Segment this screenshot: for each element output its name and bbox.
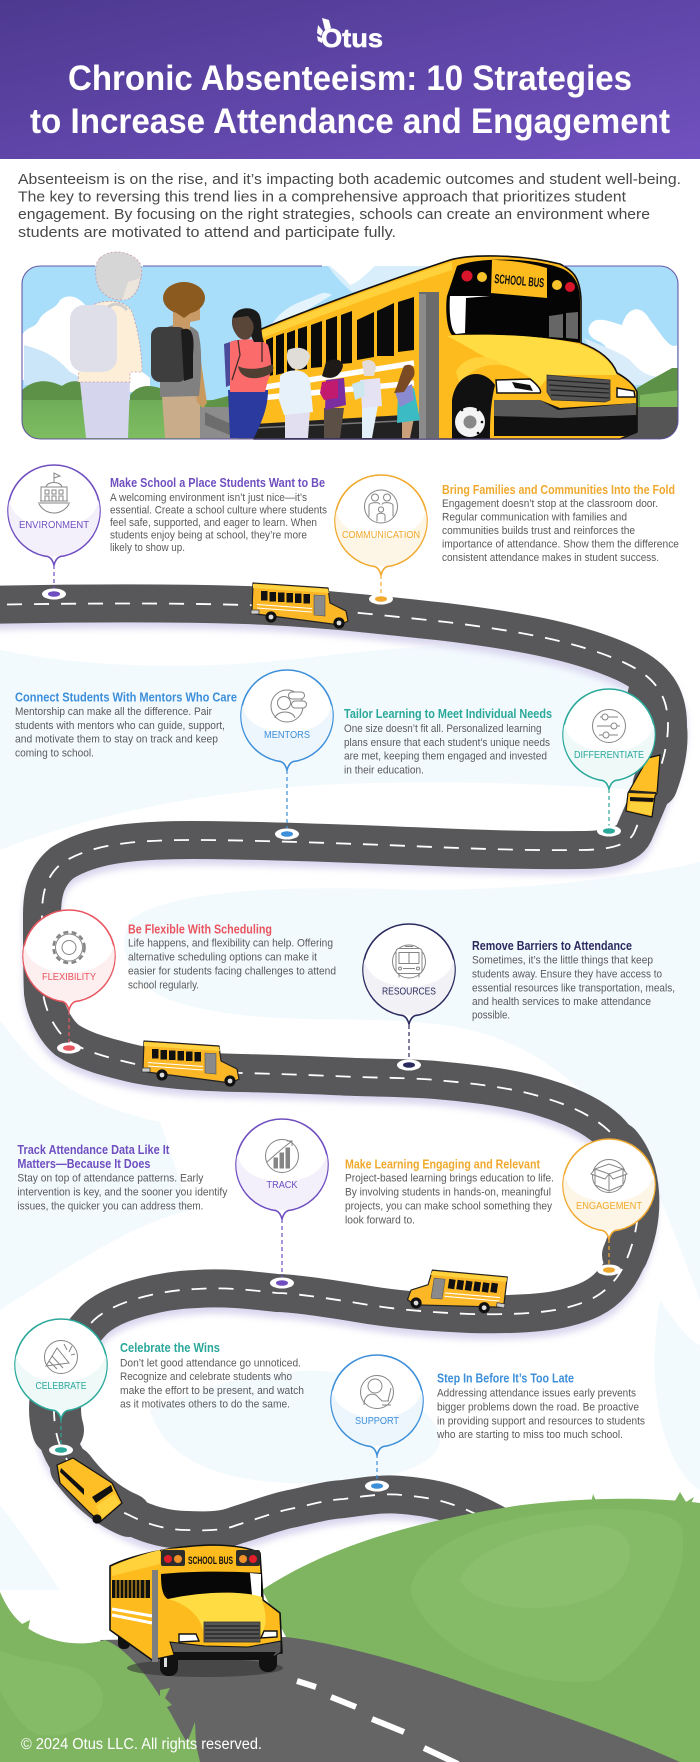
side windows — [112, 1580, 150, 1598]
text: differentiate strategy: Tailor Learning to Meet Individual Needs — [344, 707, 552, 721]
text: engagement strategy: Project-based learning brings education to life. — [345, 1173, 554, 1185]
hood — [447, 335, 617, 387]
windshield — [161, 1572, 262, 1599]
callout 2: communication — [335, 475, 427, 604]
side windows — [266, 297, 414, 377]
door — [419, 292, 439, 439]
icon: gear — [54, 932, 84, 963]
icon: sliders — [592, 710, 626, 742]
callout 7: track: TRACK — [266, 1179, 298, 1191]
intro paragraph: engagement. By focusing on the right strategies, schools can create an environment where — [18, 206, 650, 223]
icon: family — [364, 490, 398, 523]
text: track strategy: Track Attendance Data Like It — [17, 1143, 170, 1157]
text: communication strategy — [442, 483, 679, 564]
text: support strategy: who are starting to miss too much school. — [436, 1429, 623, 1441]
text: differentiate strategy: are met, keeping them engaged and invested — [344, 751, 547, 763]
faded student, foreground — [70, 252, 142, 438]
text: resources strategy: Remove Barriers to Attendance — [472, 939, 632, 953]
callout 10: support — [331, 1355, 423, 1492]
icon: rising bar chart — [266, 1140, 298, 1172]
student in coral shirt — [224, 308, 273, 438]
text: support strategy: Addressing attendance issues early prevents — [437, 1387, 636, 1399]
icon: party popper — [44, 1340, 78, 1374]
hood — [168, 1593, 266, 1642]
small bus on right bend, heading down — [626, 755, 660, 817]
text: resources strategy: essential resources like transportation, meals, — [472, 982, 675, 994]
callout 3: mentors — [241, 670, 333, 840]
title — [30, 58, 670, 141]
sign and lights: SCHOOL BUS — [188, 1555, 233, 1567]
text: flexibility strategy: alternative scheduling options can make it — [128, 952, 318, 964]
callout 4: differentiate: DIFFERENTIATE — [574, 749, 644, 761]
text: environment strategy: students enjoy being at school, they’re more — [110, 530, 307, 542]
callout 3: mentors: MENTORS — [264, 729, 310, 741]
text: mentors strategy: students with mentors who can guide, support, — [15, 720, 225, 732]
text: resources strategy: Sometimes, it’s the little things that keep — [472, 955, 653, 967]
faded student 6 — [352, 360, 382, 438]
text: flexibility strategy — [128, 922, 336, 991]
text: resources strategy: students away. Ensure they have access to — [472, 968, 662, 980]
icon: person at laptop — [360, 1376, 394, 1408]
text: track strategy: issues, the quicker you can address them. — [17, 1200, 203, 1212]
text: differentiate strategy — [344, 707, 552, 776]
text: celebrate strategy: Recognize and celebrate students who — [120, 1371, 292, 1383]
text: support strategy: Step In Before It’s Too Late — [437, 1372, 574, 1386]
intro paragraph: The key to reversing this trend lies in a comprehensive approach that prioritizes student — [18, 188, 627, 206]
school bus — [254, 256, 637, 439]
text: mentors strategy — [15, 690, 237, 760]
text: celebrate strategy: as it motivates others to do the same. — [120, 1399, 290, 1411]
text: resources strategy — [472, 939, 675, 1022]
text: engagement strategy — [345, 1157, 554, 1226]
callout 9: celebrate — [15, 1319, 107, 1456]
text: communication strategy: Regular communication with families and — [442, 512, 627, 524]
headlight — [496, 379, 541, 393]
text: mentors strategy: coming to school. — [15, 748, 94, 760]
callout 8: engagement: ENGAGEMENT — [576, 1200, 643, 1212]
text: mentors strategy: and motivate them to stay on track and keep — [15, 734, 218, 746]
text: engagement strategy: Make Learning Engaging and Relevant — [345, 1157, 541, 1171]
text: support strategy: in providing support and resources to students — [437, 1415, 645, 1427]
trees and grass — [22, 368, 680, 440]
clouds — [22, 266, 677, 392]
small bus on third road — [142, 1041, 239, 1087]
windshield and top band — [446, 260, 580, 343]
text: support strategy: bigger problems down the road. Be proactive — [437, 1401, 639, 1413]
callout 2: communication: COMMUNICATION — [342, 529, 420, 541]
text: flexibility strategy: Life happens, and flexibility can help. Offering — [128, 938, 333, 950]
text: track strategy: intervention is key, and the sooner you identify — [17, 1187, 228, 1199]
logo: Otus: Otus — [321, 23, 383, 53]
tires — [118, 1625, 130, 1649]
icon: mentor with speech bubbles — [271, 690, 306, 722]
bumper — [494, 400, 637, 436]
foreground road — [100, 1637, 680, 1762]
text: resources strategy: and health services to make attendance — [472, 996, 651, 1008]
text: environment strategy: A welcoming environment isn’t just nice—it’s — [110, 492, 307, 504]
grille — [547, 375, 610, 402]
small bus on lower bend, heading down — [57, 1458, 122, 1523]
grille — [204, 1622, 260, 1642]
icon: school building — [38, 473, 70, 513]
title: to Increase Attendance and Engagement — [30, 101, 670, 141]
sign and lights — [161, 1550, 260, 1567]
title: Chronic Absenteeism: 10 Strategies — [68, 58, 632, 98]
hero illustration: students boarding a school bus — [22, 252, 680, 440]
header banner — [0, 0, 700, 159]
intro paragraph: students are motivated to attend and participate fully. — [18, 224, 396, 241]
callout 6: resources — [363, 924, 455, 1070]
icon: bus front — [392, 945, 426, 978]
icon: open box — [591, 1160, 627, 1192]
callout 1: environment — [8, 465, 100, 600]
text: celebrate strategy: make the effort to be present, and watch — [120, 1385, 304, 1397]
text: environment strategy: likely to show up. — [110, 542, 185, 554]
text: differentiate strategy: One size doesn’t fit all. Personalized learning — [344, 723, 542, 735]
text: communication strategy: Engagement doesn’t stop at the classroom door. — [442, 498, 658, 510]
text: flexibility strategy: easier for students facing challenges to attend — [128, 966, 336, 978]
wheel — [452, 374, 495, 439]
student with magenta backpack — [320, 359, 346, 438]
right green hill — [262, 1492, 700, 1762]
text: track strategy: Stay on top of attendance patterns. Early — [17, 1173, 204, 1185]
small bus on top road — [251, 583, 348, 629]
intro paragraph: Absenteeism is on the rise, and it’s impacting both academic outcomes and student well-being. — [18, 171, 681, 188]
left green hill — [0, 1592, 200, 1762]
text: communication strategy: importance of attendance. Show them the difference — [442, 539, 679, 551]
callout 8: engagement — [563, 1139, 655, 1276]
callout 7: track — [236, 1119, 328, 1288]
large school bus in the foreground — [110, 1545, 283, 1677]
callout 5: flexibility: FLEXIBILITY — [42, 971, 96, 983]
intro paragraph — [18, 171, 681, 241]
text: celebrate strategy — [120, 1341, 304, 1411]
callout 9: celebrate: CELEBRATE — [36, 1380, 86, 1392]
text: engagement strategy: look forward to. — [345, 1214, 415, 1226]
text: flexibility strategy: Be Flexible With Scheduling — [128, 922, 272, 936]
text: mentors strategy: Connect Students With Mentors Who Care — [15, 690, 237, 704]
text: support strategy — [436, 1372, 645, 1441]
text: track strategy — [17, 1143, 228, 1212]
sign: school bus — [491, 260, 547, 298]
copyright footer: © 2024 Otus LLC. All rights reserved. — [21, 1736, 262, 1753]
text: track strategy: Matters—Because It Does — [17, 1157, 150, 1171]
text: celebrate strategy: Don’t let good attendance go unnoticed. — [120, 1357, 301, 1369]
callout 10: support: SUPPORT — [355, 1415, 400, 1427]
page background swirls — [0, 644, 700, 1590]
headlights — [179, 1634, 199, 1642]
sign: school bus: SCHOOL BUS — [494, 271, 545, 290]
text: environment strategy: Make School a Place Students Want to Be — [110, 476, 325, 490]
callout 4: differentiate — [563, 689, 655, 836]
text: mentors strategy: Mentorship can make all the difference. Pair — [15, 706, 212, 718]
text: differentiate strategy: in their education. — [344, 764, 424, 776]
small bus on fourth road, heading left — [406, 1262, 509, 1322]
faded student 4 — [279, 348, 313, 438]
bumper — [170, 1641, 281, 1658]
text: environment strategy — [110, 476, 327, 554]
text: communication strategy: communities builds trust and reinforces the — [442, 525, 635, 537]
winding road — [0, 604, 668, 1556]
student in teal dress — [394, 365, 420, 438]
student with black backpack — [151, 282, 207, 438]
text: communication strategy: consistent attendance makes in student success. — [442, 552, 659, 564]
callout 6: resources: RESOURCES — [382, 986, 436, 998]
text: environment strategy: essential. Create a school culture where students — [110, 504, 327, 516]
callout 5: flexibility — [23, 910, 115, 1054]
text: environment strategy: feel safe, supported, and eager to learn. When — [110, 517, 317, 529]
callout 1: environment: ENVIRONMENT — [19, 519, 90, 531]
side stripes — [260, 363, 414, 398]
text: resources strategy: possible. — [472, 1010, 510, 1022]
text: differentiate strategy: plans ensure that each student’s unique needs — [344, 737, 550, 749]
text: engagement strategy: By involving students in hands-on, meaningful — [345, 1187, 551, 1199]
text: celebrate strategy: Celebrate the Wins — [120, 1341, 220, 1355]
text: flexibility strategy: school regularly. — [128, 979, 199, 991]
text: engagement strategy: projects, you can make school something they — [345, 1200, 552, 1212]
